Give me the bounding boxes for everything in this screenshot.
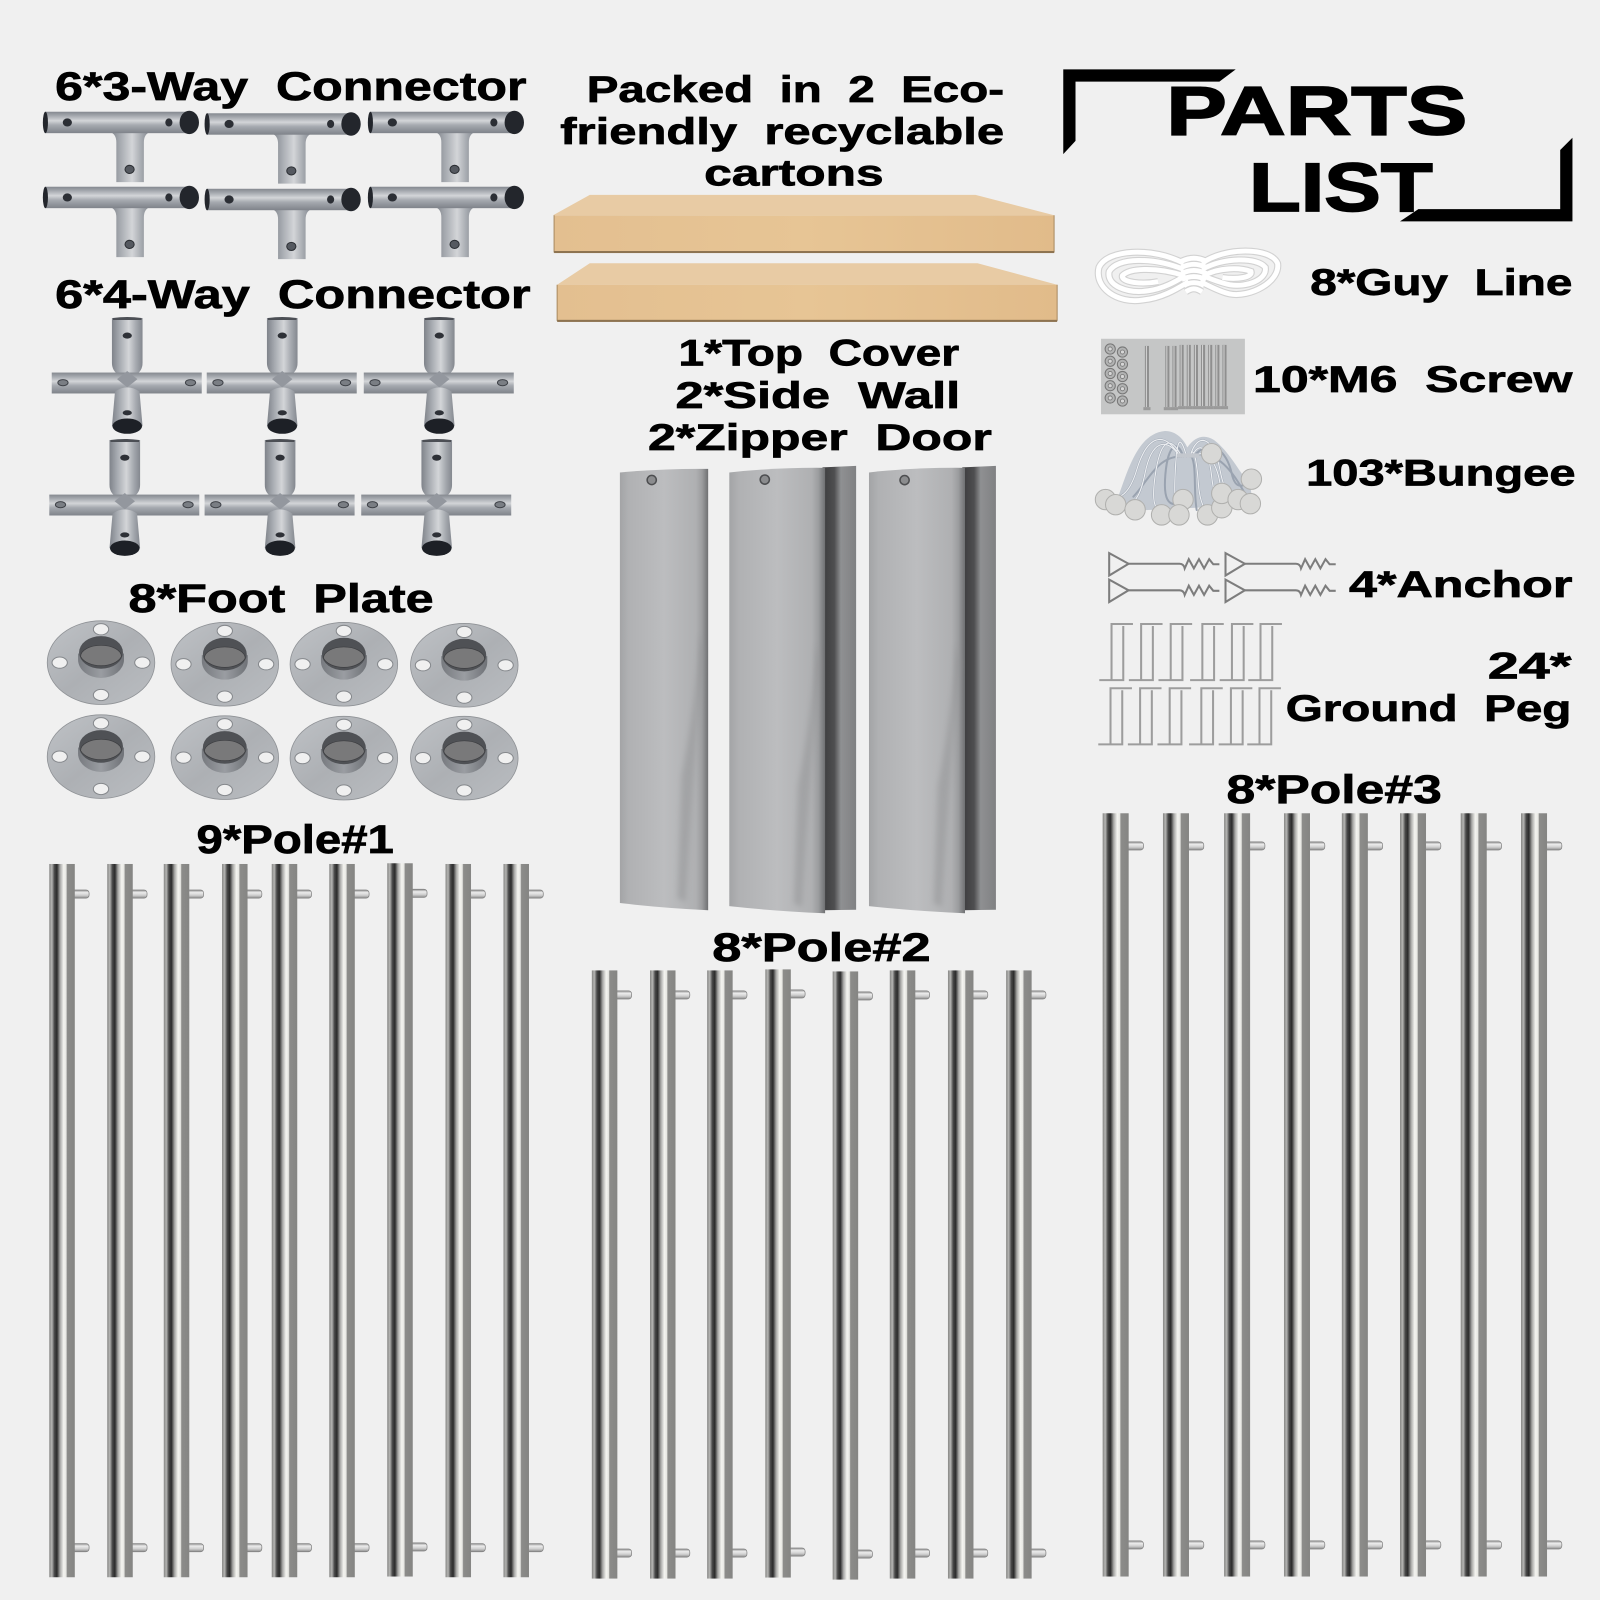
title: PARTS: PARTS: [1166, 74, 1467, 150]
icon: top cover: [620, 469, 708, 910]
text: packed in cartons: Packed in 2 Eco-: [587, 68, 1004, 110]
text: cover wall and door counts: 1*Top Cover: [679, 331, 959, 373]
icon: side wall: [729, 466, 856, 913]
panel: foot plates: [47, 576, 518, 800]
heading: 6*3-Way Connector: 6*3-Way Connector: [55, 64, 527, 109]
icon: bungee balls bundle: [1095, 431, 1262, 525]
icons: eight poles #2: [592, 969, 1046, 1580]
icons: six 3-way connectors: [43, 111, 524, 259]
panel: pole 3: [1103, 767, 1562, 1577]
frame: top-left corner bracket: [1063, 69, 1236, 154]
icons: nine poles #1: [49, 863, 543, 1577]
item: bungee: [1095, 431, 1576, 525]
label: 10*M6 Screw: 10*M6 Screw: [1253, 359, 1573, 400]
heading: 8*Pole#2: 8*Pole#2: [712, 925, 931, 970]
label: 4*Anchor: 4*Anchor: [1349, 563, 1572, 605]
label: 103*Bungee: 103*Bungee: [1306, 452, 1576, 494]
item: ground peg: [1098, 624, 1572, 744]
panel: pole 1: [49, 817, 543, 1577]
panel: 4-way connectors: [49, 272, 531, 556]
panel: 3-way connectors: [43, 64, 527, 259]
panel: fabric parts: [620, 331, 996, 913]
frame: bottom-right corner bracket: [1400, 138, 1572, 221]
text: cover wall and door counts: 2*Zipper Door: [648, 416, 992, 458]
heading: 9*Pole#1: 9*Pole#1: [197, 817, 394, 862]
item: anchor: [1109, 553, 1572, 605]
text: packed in cartons: [560, 68, 1004, 194]
icon: ground pegs: [1098, 624, 1282, 744]
label: 24* Ground Peg: 24*: [1488, 645, 1572, 687]
icon: rope coil: [1098, 251, 1278, 301]
text: packed in cartons: friendly recyclable: [560, 110, 1004, 152]
icons: six 4-way connectors: [49, 317, 514, 556]
icon: screws and nuts: [1101, 339, 1245, 414]
label: 24* Ground Peg: Ground Peg: [1286, 687, 1571, 729]
icons: eight poles #3: [1103, 813, 1562, 1577]
icon: upper carton: [553, 195, 1054, 253]
heading: 8*Foot Plate: 8*Foot Plate: [129, 576, 434, 621]
panel: pole 2: [592, 925, 1046, 1580]
panel: cartons: [553, 68, 1057, 322]
item: M6 screw: [1101, 339, 1573, 414]
icons: eight foot plates: [47, 621, 518, 800]
item: guy line: [1098, 251, 1572, 303]
icon: four anchors: [1109, 553, 1336, 602]
label: 8*Guy Line: 8*Guy Line: [1310, 262, 1572, 303]
text: cover wall and door counts: [648, 331, 992, 458]
label: 24* Ground Peg: [1286, 645, 1572, 729]
heading: 6*4-Way Connector: 6*4-Way Connector: [55, 272, 531, 317]
icon: lower carton: [557, 263, 1057, 322]
heading: 8*Pole#3: 8*Pole#3: [1227, 767, 1442, 812]
icon: zipper door: [869, 466, 996, 913]
title block: parts list: [1063, 69, 1572, 226]
text: packed in cartons: cartons: [704, 152, 884, 194]
title: LIST: LIST: [1249, 150, 1433, 226]
text: cover wall and door counts: 2*Side Wall: [676, 374, 960, 416]
